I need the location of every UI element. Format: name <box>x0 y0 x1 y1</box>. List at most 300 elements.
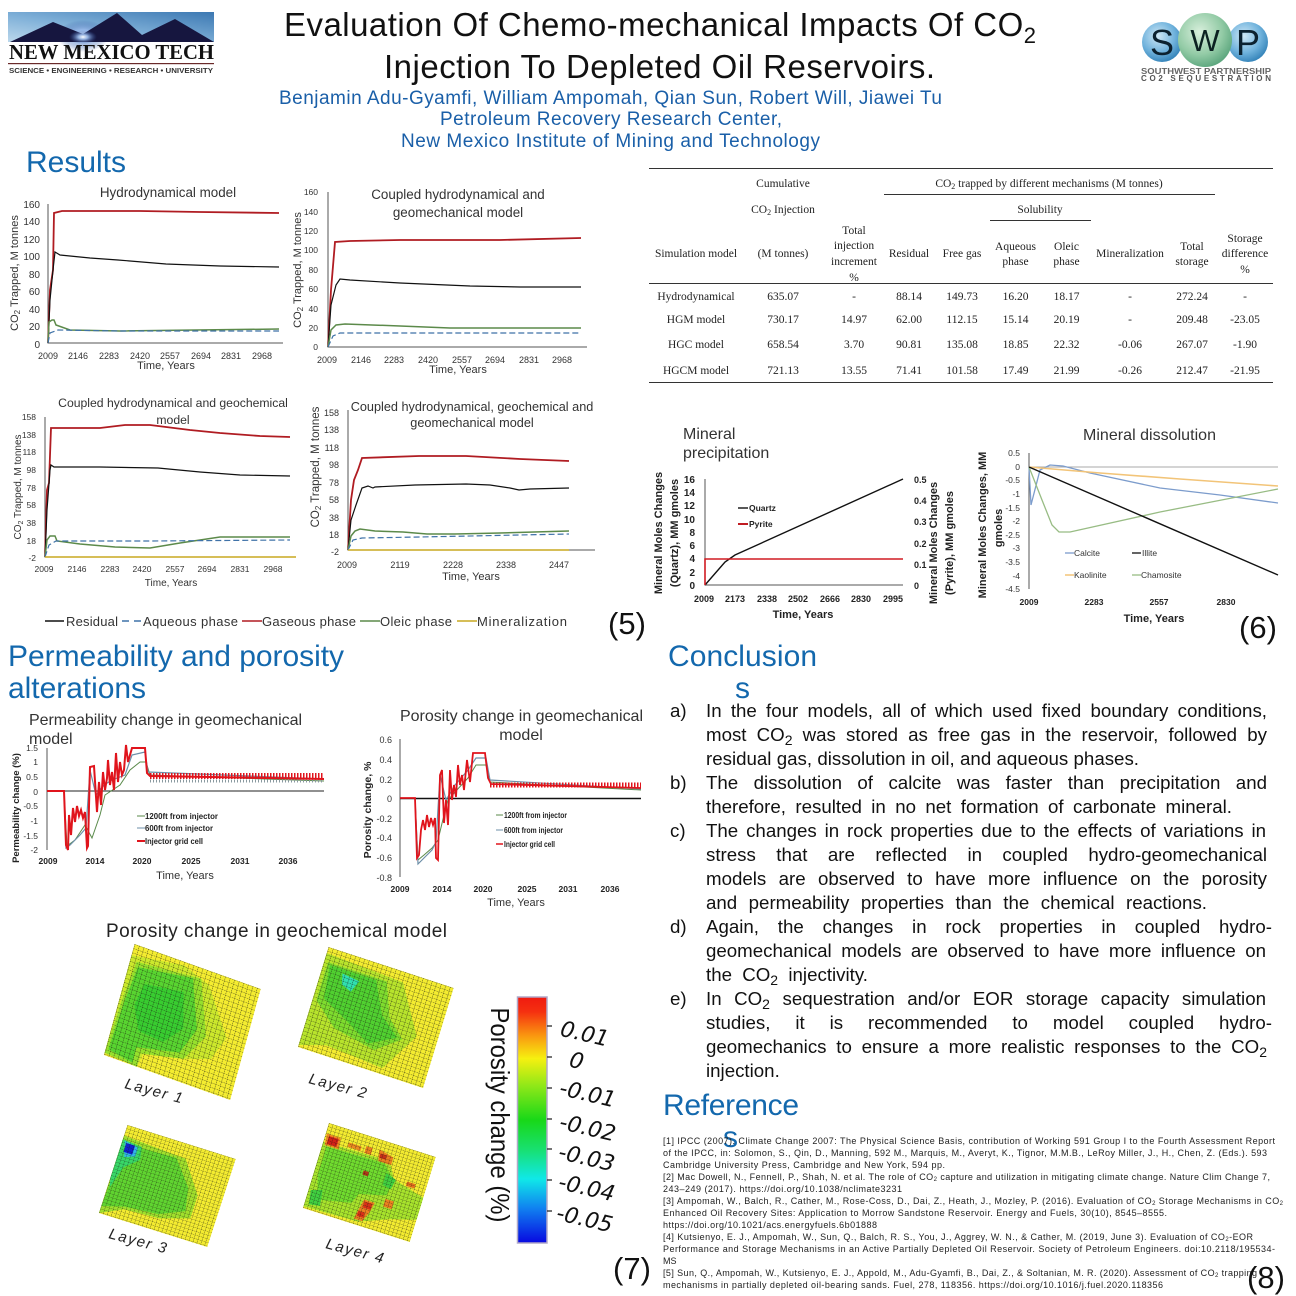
chart: Coupled hydrodynamical and geochemical model: -2 <box>28 553 36 563</box>
chart: Mineral dissolution: -4 <box>1012 571 1020 581</box>
chart: Mineral precipitation: 0.3 <box>914 517 927 527</box>
heading: References: Reference <box>663 1089 799 1122</box>
chart: Mineral dissolution: 2557 <box>1150 597 1169 607</box>
figure number 6: (6) <box>1239 610 1277 645</box>
text block: conclusions: Again, the changes in rock properties in coupled hydro- <box>706 916 1272 937</box>
table: CO2 trapped by mechanism: Aqueous <box>995 241 1036 253</box>
table: CO2 trapped by mechanism: 2 <box>767 208 771 217</box>
chart: Coupled hydrodynamical and geomechanical model: 80 <box>309 265 318 275</box>
chart: Mineral precipitation: 12 <box>684 501 695 512</box>
chart: Mineral precipitation: 2502 <box>788 594 808 604</box>
table: CO2 trapped by mechanism: 88.14 <box>896 291 922 303</box>
label: Porosity change in geomechanical model: model <box>499 727 543 744</box>
chart: Coupled hydrodynamical, geochemical and geomechanical model: Time, Years <box>442 571 500 583</box>
table: CO2 trapped by mechanism: HGCM model <box>663 365 729 377</box>
chart: Coupled hydrodynamical and geochemical model: 2 <box>18 521 25 525</box>
chart: Mineral dissolution: Kaolinite <box>1074 570 1107 580</box>
chart: Porosity change: 2020 <box>474 884 493 894</box>
chart: Coupled hydrodynamical and geochemical model: 2831 <box>231 564 250 574</box>
table: CO2 trapped by mechanism: -1.90 <box>1233 339 1257 351</box>
chart: Coupled hydrodynamical, geochemical and geomechanical model: Coupled hydrodynamical, geochemical and <box>351 400 593 414</box>
chart: Coupled hydrodynamical and geomechanical model <box>292 187 587 376</box>
chart: Coupled hydrodynamical, geochemical and geomechanical model: 158 <box>324 408 339 418</box>
text block: conclusions: and permeability properties than the chemical reactions. <box>706 892 1207 913</box>
label: Porosity change in geomechanical model <box>400 708 643 744</box>
heatmap: Layer 1 <box>104 944 261 1100</box>
chart: Mineral precipitation: 0 <box>914 581 919 591</box>
text block: references: [5] Sun, Q., Ampomah, W., Kutsienyo, E. J., Appold, M., Adu-Gyamfi, B., Dai, Z., & Soltanian, M. R. (2020). Assessment of CO <box>663 1268 1215 1278</box>
logo: New Mexico Tech <box>8 12 214 75</box>
text block: references: 2 <box>1152 1201 1156 1207</box>
table: CO2 trapped by mechanism: CO <box>935 178 951 190</box>
chart: Coupled hydrodynamical and geochemical model: 118 <box>22 447 36 457</box>
chart: Porosity change: 0.4 <box>379 755 392 765</box>
label: Layer 4: Layer 4 <box>324 1235 387 1268</box>
logo: Southwest Partnership: W <box>1190 23 1220 58</box>
chart: Permeability change: -1.5 <box>23 831 38 841</box>
legend: CO2 trapping series <box>45 614 567 629</box>
chart: Hydrodynamical model: 160 <box>23 200 40 211</box>
text block: references: https://doi.org/10.1021/acs.energyfuels.6b01888 <box>663 1220 877 1230</box>
chart: Coupled hydrodynamical, geochemical and geomechanical model: 58 <box>329 495 339 505</box>
chart: Mineral precipitation: 2830 <box>851 594 871 604</box>
colour bar: Porosity change: -0.01 <box>557 1076 618 1113</box>
table: CO2 trapped by mechanism: 149.73 <box>946 291 978 303</box>
chart: Mineral dissolution: Calcite <box>1074 548 1100 558</box>
text block: references: 2 <box>934 1177 938 1183</box>
text block: references: 2 <box>1225 1237 1229 1243</box>
chart: Mineral dissolution: Chamosite <box>1141 570 1182 580</box>
chart: Coupled hydrodynamical and geomechanical model: geomechanical model <box>393 205 523 220</box>
chart: Hydrodynamical model: Hydrodynamical model <box>100 185 236 200</box>
table: CO2 trapped by mechanism: Free gas <box>943 248 982 260</box>
chart: Permeability change: 2020 <box>133 856 152 866</box>
chart: Coupled hydrodynamical, geochemical and geomechanical model: 2447 <box>549 560 569 570</box>
legend: CO2 trapping series: Mineralization <box>477 614 567 629</box>
table: CO2 trapped by mechanism: 721.13 <box>767 365 799 377</box>
chart: Coupled hydrodynamical, geochemical and geomechanical model: geomechanical model <box>410 416 534 430</box>
chart: Permeability change: 1 <box>33 757 38 767</box>
chart: Coupled hydrodynamical and geomechanical model: CO <box>292 311 304 328</box>
text block: references: of the IPCC, in: Solomon, S., Qin, D., Manning, 592 M., Marquis, M., Averyt, K., Tignor, M.M.B., LeRoy Miller, J., H., Chen, Z. (Eds.). 593 <box>663 1148 1267 1158</box>
table: CO2 trapped by mechanism: (M tonnes) <box>758 248 809 260</box>
table: CO2 trapped by mechanism: - <box>1128 291 1132 303</box>
chart: Coupled hydrodynamical, geochemical and geomechanical model: 2 <box>314 505 323 510</box>
chart: Coupled hydrodynamical and geomechanical model: 2283 <box>384 355 404 365</box>
text block: references: mechanisms in partially depleted oil-bearing sands. Fuel, 278, 118356. https://doi.org/10.1016/j.fuel.2020.118356 <box>663 1280 1163 1290</box>
figure number 8: (8) <box>1247 1260 1285 1295</box>
colour bar: Porosity change: -0.02 <box>557 1110 618 1147</box>
chart: Mineral dissolution: -4.5 <box>1005 584 1020 594</box>
chart: Coupled hydrodynamical and geochemical model: Time, Years <box>145 578 197 589</box>
text block: conclusions: therefore, resulted in no net formation of carbonate mineral. <box>706 796 1232 817</box>
heading: Permeability and porosity alterations <box>8 640 344 705</box>
chart: Hydrodynamical model: 0 <box>34 340 40 351</box>
chart: Coupled hydrodynamical and geomechanical model: 2968 <box>552 355 572 365</box>
chart: Mineral precipitation: 2995 <box>883 594 903 604</box>
heading: References: s <box>723 1121 738 1154</box>
chart: Porosity change: Porosity change, % <box>362 761 374 858</box>
chart: Hydrodynamical model: Time, Years <box>137 360 195 372</box>
chart: Mineral precipitation: 2173 <box>725 594 745 604</box>
table: CO2 trapped by mechanism: 112.15 <box>946 314 978 326</box>
chart: Permeability change: 2036 <box>279 856 298 866</box>
text block: conclusions: geomechanical models are observed to have more influence on <box>706 940 1266 961</box>
text block: references: MS <box>663 1256 676 1266</box>
text block: conclusions: The dissolution of calcite was faster than precipitation and <box>706 772 1267 793</box>
table: CO2 trapped by mechanism: 272.24 <box>1176 291 1208 303</box>
chart: Hydrodynamical model: 2557 <box>160 351 180 361</box>
table: CO2 trapped by mechanism: HGC model <box>668 339 724 351</box>
authors and affiliation: Benjamin Adu-Gyamfi, William Ampomah, Qian Sun, Robert Will, Jiawei Tu <box>279 88 942 109</box>
chart: Hydrodynamical model: 100 <box>23 252 40 263</box>
title: Injection To Depleted Oil Reservoirs. <box>384 48 935 85</box>
colour bar: Porosity change: Porosity change (%) <box>485 1008 515 1222</box>
text block: conclusions: stress that are reflected in coupled hydro-geomechanical <box>706 844 1267 865</box>
chart: Mineral dissolution: -1.5 <box>1005 503 1020 513</box>
chart: Coupled hydrodynamical and geochemical model: 38 <box>27 518 36 528</box>
chart: Mineral dissolution: 0.5 <box>1008 448 1020 458</box>
chart: Permeability change: 600ft from injector <box>145 823 214 833</box>
chart: Mineral precipitation: (Pyrite), MM gmoles <box>944 491 956 595</box>
table: CO2 trapped by mechanism: % <box>849 272 859 284</box>
title: Evaluation Of Chemo-mechanical Impacts Of CO <box>284 6 1023 43</box>
table: CO2 trapped by mechanism: 17.49 <box>1003 365 1029 377</box>
table: CO2 trapped by mechanism: 730.17 <box>767 314 799 326</box>
chart: Permeability change: -2 <box>30 845 38 855</box>
chart: Porosity change: 0.6 <box>379 735 392 745</box>
table: CO2 trapped by mechanism: phase <box>1002 256 1029 268</box>
logo: New Mexico Tech: SCIENCE • ENGINEERING • RESEARCH • UNIVERSITY <box>9 68 213 75</box>
label: Mineral precipitation <box>683 426 769 462</box>
chart: Hydrodynamical model: 2694 <box>191 351 211 361</box>
chart: Coupled hydrodynamical, geochemical and geomechanical model: -2 <box>331 547 339 557</box>
chart: Mineral precipitation: 0 <box>689 581 695 592</box>
chart: Coupled hydrodynamical and geomechanical model: Time, Years <box>429 364 487 376</box>
chart: Porosity change: 0 <box>387 794 392 804</box>
text block: conclusions: In the four models, all of which used fixed boundary conditions, <box>706 700 1267 721</box>
chart: Hydrodynamical model: 2968 <box>252 351 272 361</box>
label: Layer 1: Layer 1 <box>123 1075 186 1108</box>
table: CO2 trapped by mechanism: 101.58 <box>946 365 978 377</box>
chart: Coupled hydrodynamical and geochemical model: 2420 <box>133 564 152 574</box>
text block: references: [1] IPCC (2007). Climate Change 2007: The Physical Science Basis, contribution of Working 591 Group I to the Fourth Assessment Report <box>663 1136 1275 1146</box>
legend: CO2 trapping series: Residual <box>66 614 118 629</box>
chart: Mineral dissolution: -3.5 <box>1005 557 1020 567</box>
chart: Mineral precipitation: 6 <box>689 541 695 552</box>
chart: Coupled hydrodynamical and geochemical model: 2283 <box>101 564 120 574</box>
heading: Permeability and porosity alterations: alterations <box>8 672 146 705</box>
table: CO2 trapped by mechanism: Simulation model <box>655 248 737 260</box>
table: CO2 trapped by mechanism: 212.47 <box>1176 365 1208 377</box>
figure number 7: (7) <box>613 1251 651 1286</box>
legend: CO2 trapping series: Oleic phase <box>380 614 452 629</box>
chart: Mineral precipitation: 2 <box>689 568 695 579</box>
chart: Coupled hydrodynamical and geomechanical model: 20 <box>309 323 318 333</box>
chart: Coupled hydrodynamical and geochemical model: 138 <box>22 430 36 440</box>
chart: Coupled hydrodynamical, geochemical and geomechanical model: 98 <box>329 460 339 470</box>
table: CO2 trapped by mechanism: -23.05 <box>1230 314 1260 326</box>
chart: Permeability change <box>11 743 324 882</box>
chart: Mineral dissolution: -2 <box>1012 516 1020 526</box>
chart: Porosity change: 2031 <box>559 884 578 894</box>
chart: Porosity change: -0.2 <box>376 814 392 824</box>
table: CO2 trapped by mechanism: 2 <box>951 182 955 191</box>
table: CO2 trapped by mechanism: 18.17 <box>1054 291 1080 303</box>
chart: Coupled hydrodynamical, geochemical and geomechanical model: 2119 <box>390 560 410 570</box>
text block: references: 2 <box>1215 1273 1219 1279</box>
table: CO2 trapped by mechanism <box>649 168 1273 382</box>
chart: Coupled hydrodynamical and geochemical model: 58 <box>27 500 36 510</box>
chart: Permeability change: 2025 <box>182 856 201 866</box>
table: CO2 trapped by mechanism: 18.85 <box>1003 339 1029 351</box>
chart: Mineral precipitation: 14 <box>684 488 695 499</box>
chart: Mineral precipitation: Mineral Moles Changes <box>928 482 940 604</box>
heading: Conclusions <box>668 640 817 705</box>
logo: Southwest Partnership: P <box>1236 22 1260 63</box>
chart: Coupled hydrodynamical and geomechanical model: 160 <box>304 187 318 197</box>
chart: Mineral dissolution: 0 <box>1015 462 1020 472</box>
table: CO2 trapped by mechanism: 14.97 <box>841 314 867 326</box>
text block: conclusions: In CO2 sequestration and/or EOR storage capacity simulation <box>706 988 1266 1012</box>
chart: Porosity change: 1200ft from injector <box>504 810 568 820</box>
table: CO2 trapped by mechanism: 90.81 <box>896 339 922 351</box>
label: Mineral precipitation: Mineral <box>683 426 735 443</box>
chart: Coupled hydrodynamical and geomechanical model: 2009 <box>317 355 337 365</box>
chart: Coupled hydrodynamical and geochemical model: 2968 <box>264 564 283 574</box>
chart: Coupled hydrodynamical, geochemical and geomechanical model: 138 <box>324 425 339 435</box>
chart: Coupled hydrodynamical and geochemical model: 2146 <box>68 564 87 574</box>
table: CO2 trapped by mechanism: phase <box>1053 256 1080 268</box>
colour bar: Porosity change: -0.04 <box>556 1170 617 1207</box>
table: CO2 trapped by mechanism: Storage <box>1227 233 1263 245</box>
chart: Mineral precipitation: 0.4 <box>914 496 927 506</box>
chart: Permeability change: 0 <box>33 787 38 797</box>
text block: references <box>663 1136 1284 1290</box>
chart: Coupled hydrodynamical and geomechanical model: 2420 <box>418 355 438 365</box>
chart: Permeability change: 0.5 <box>26 772 38 782</box>
chart: Coupled hydrodynamical and geomechanical model: 140 <box>304 207 318 217</box>
text block: conclusions: b) <box>670 772 687 793</box>
colour bar: Porosity change: -0.05 <box>554 1201 615 1238</box>
table: CO2 trapped by mechanism: increment <box>831 256 878 268</box>
text block: references: Performance and Storage Mechanisms in an Active Partially Depleted Oil Reservoir. Society of Petroleum Engineers. doi:10.2118/195534- <box>663 1244 1275 1254</box>
chart: Mineral precipitation: 8 <box>689 528 695 539</box>
table: CO2 trapped by mechanism: difference <box>1222 248 1268 260</box>
chart: Porosity change: 2036 <box>601 884 620 894</box>
table: CO2 trapped by mechanism: - <box>852 291 856 303</box>
chart: Mineral precipitation: 0.2 <box>914 539 927 549</box>
chart: Mineral precipitation <box>653 472 956 621</box>
text block: conclusions <box>670 700 1272 1081</box>
chart: Mineral precipitation: Mineral Moles Changes <box>653 472 665 594</box>
text block: references: Storage Mechanisms in CO <box>1156 1196 1279 1206</box>
chart: Mineral dissolution: -3 <box>1012 543 1020 553</box>
chart: Hydrodynamical model: 140 <box>23 217 40 228</box>
label: Layer 2: Layer 2 <box>307 1070 370 1103</box>
legend: CO2 trapping series: Gaseous phase <box>262 614 356 629</box>
chart: Hydrodynamical model: 80 <box>29 270 40 281</box>
legend: CO2 trapping series: Aqueous phase <box>143 614 238 629</box>
chart: Mineral dissolution: gmoles <box>993 509 1005 547</box>
chart: Mineral dissolution: -0.5 <box>1005 475 1020 485</box>
text block: references: trapping <box>1219 1268 1257 1278</box>
chart: Hydrodynamical model: CO <box>9 314 21 331</box>
table: CO2 trapped by mechanism: Mineralization <box>1096 248 1164 260</box>
chart: Coupled hydrodynamical and geochemical model: model <box>156 413 190 427</box>
label: Permeability change in geomechanical model: model <box>29 731 73 748</box>
chart: Porosity change: Injector grid cell <box>504 839 555 849</box>
chart: Permeability change: Time, Years <box>156 870 214 882</box>
chart: Mineral dissolution: 2283 <box>1085 597 1104 607</box>
text block: references: [4] Kutsienyo, E. J., Ampomah, W., Sun, Q., Balch, R. S., You, J., Aggrey, W. N., & Cather, M. (2019, June 3). Evaluation of CO <box>663 1232 1225 1242</box>
chart: Coupled hydrodynamical and geomechanical model: 2 <box>296 306 305 311</box>
logo: New Mexico Tech: NEW MEXICO TECH <box>9 40 214 64</box>
table: CO2 trapped by mechanism: - <box>1128 314 1132 326</box>
text block: conclusions: geomechanics to ensure a more realistic responses to the CO2 <box>706 1036 1267 1060</box>
chart: Coupled hydrodynamical and geomechanical model: 2831 <box>519 355 539 365</box>
chart: Permeability change: 2014 <box>86 856 105 866</box>
chart: Mineral dissolution: 2009 <box>1020 597 1039 607</box>
text block: references: -EOR <box>1229 1232 1254 1242</box>
text block: references: [2] Mac Dowell, N., Fennell, P., Shah, N. et al. The role of CO <box>663 1172 933 1182</box>
table: CO2 trapped by mechanism: - <box>1243 291 1247 303</box>
logo: Southwest Partnership: S <box>1150 22 1174 63</box>
table: CO2 trapped by mechanism: -21.95 <box>1230 365 1260 377</box>
text block: references: Cambridge University Press, Cambridge and New York, 594 pp. <box>663 1160 945 1170</box>
chart: Coupled hydrodynamical and geomechanical model: 0 <box>313 342 318 352</box>
table: CO2 trapped by mechanism: injection <box>834 240 874 252</box>
chart: Mineral dissolution: Mineral Moles Changes, MM <box>977 452 989 598</box>
heading: Results: Results <box>26 146 126 179</box>
chart: Porosity change <box>362 735 641 909</box>
logo: Southwest Partnership <box>1141 13 1272 83</box>
chart: Coupled hydrodynamical and geomechanical model: 40 <box>309 304 318 314</box>
text block: conclusions: residual gas, dissolution in oil, and aqueous phases. <box>706 748 1139 769</box>
text block: conclusions: a) <box>670 700 687 721</box>
chart: Coupled hydrodynamical, geochemical and geomechanical model: 2009 <box>337 560 357 570</box>
chart: Porosity change: 600ft from injector <box>504 825 564 835</box>
logo: Southwest Partnership: SOUTHWEST PARTNERSHIP <box>1141 67 1272 76</box>
colour bar: Porosity change <box>485 997 618 1243</box>
table: CO2 trapped by mechanism: trapped by different mechanisms (M tonnes) <box>955 178 1163 190</box>
chart: Hydrodynamical model: 2283 <box>99 351 119 361</box>
chart: Coupled hydrodynamical and geomechanical model: 2146 <box>351 355 371 365</box>
chart: Mineral dissolution: -1 <box>1012 489 1020 499</box>
chart: Porosity change: -0.4 <box>376 833 392 843</box>
table: CO2 trapped by mechanism: 16.20 <box>1003 291 1029 303</box>
chart: Coupled hydrodynamical and geochemical model: CO <box>13 525 24 540</box>
table: CO2 trapped by mechanism: Injection <box>771 204 815 216</box>
table: CO2 trapped by mechanism: 635.07 <box>767 291 799 303</box>
chart: Mineral precipitation: 4 <box>689 554 695 565</box>
chart: Permeability change: -1 <box>30 816 38 826</box>
table: CO2 trapped by mechanism: CO <box>751 204 767 216</box>
text block: conclusions: models are observed to have more influence on the porosity <box>706 868 1267 889</box>
chart: Porosity change: 0.2 <box>379 775 392 785</box>
heading: References <box>663 1089 799 1154</box>
table: CO2 trapped by mechanism: -0.26 <box>1118 365 1142 377</box>
title: 2 <box>1024 23 1036 48</box>
table: CO2 trapped by mechanism: 135.08 <box>946 339 978 351</box>
chart: Coupled hydrodynamical and geochemical model <box>13 396 296 589</box>
heading: Conclusions: Conclusion <box>668 640 817 673</box>
heatmap: Layer 4 <box>303 1123 436 1242</box>
table: CO2 trapped by mechanism: 13.55 <box>841 365 867 377</box>
text block: references: 243–249 (2017). https://doi.org/10.1038/nclimate3231 <box>663 1184 902 1194</box>
chart: Hydrodynamical model: 2420 <box>130 351 150 361</box>
colour bar: Porosity change: -0.03 <box>556 1140 617 1177</box>
chart: Permeability change: Permeability change (%) <box>11 753 22 863</box>
table: CO2 trapped by mechanism: Oleic <box>1054 241 1079 253</box>
table: CO2 trapped by mechanism: 62.00 <box>896 314 922 326</box>
chart: Coupled hydrodynamical and geomechanical model: 120 <box>304 226 318 236</box>
chart: Mineral precipitation: 0.1 <box>914 560 927 570</box>
chart: Porosity change: 2025 <box>518 884 537 894</box>
text block: conclusions: e) <box>670 988 687 1009</box>
text block: references: [3] Ampomah, W., Balch, R., Cather, M., Rose-Coss, D., Dai, Z., Heath, J., Mozley, P. (2016). Evaluation of CO <box>663 1196 1152 1206</box>
chart: Mineral precipitation: 0.5 <box>914 475 927 485</box>
heatmap: Layer 3 <box>99 1125 236 1247</box>
label: Mineral precipitation: precipitation <box>683 445 769 462</box>
chart: Hydrodynamical model: 2146 <box>68 351 88 361</box>
chart: Coupled hydrodynamical and geochemical model: 158 <box>22 412 36 422</box>
table: CO2 trapped by mechanism: 267.07 <box>1176 339 1208 351</box>
chart: Mineral precipitation: (Quartz), MM gmoles <box>669 479 681 587</box>
chart: Permeability change: 1200ft from injector <box>145 811 219 821</box>
chart: Porosity change: -0.6 <box>376 853 392 863</box>
text block: conclusions: The changes in rock properties due to the effects of variations in <box>706 820 1266 841</box>
chart: Hydrodynamical model: 2 <box>13 309 22 314</box>
chart: Hydrodynamical model: 60 <box>29 287 40 298</box>
chart: Mineral precipitation: 2338 <box>757 594 777 604</box>
text block: conclusions: most CO2 was stored as free gas in the reservoir, followed by <box>706 724 1267 748</box>
chart: Permeability change: 1.5 <box>26 743 38 753</box>
authors and affiliation <box>279 88 942 152</box>
chart: Porosity change: Time, Years <box>487 897 545 909</box>
colour bar: Porosity change: 0 <box>567 1048 586 1075</box>
chart: Mineral dissolution <box>977 448 1278 625</box>
chart: Coupled hydrodynamical, geochemical and geomechanical model: 38 <box>329 513 339 523</box>
label: Mineral dissolution: Mineral dissolution <box>1083 427 1216 444</box>
chart: Coupled hydrodynamical and geochemical model: Trapped, M tonnes <box>13 434 24 521</box>
table: CO2 trapped by mechanism: 209.48 <box>1176 314 1208 326</box>
heading: Permeability and porosity alterations: Permeability and porosity <box>8 640 344 673</box>
text block: conclusions: studies, it is recommended to model coupled hydro- <box>706 1012 1272 1033</box>
chart: Hydrodynamical model: Trapped, M tonnes <box>9 215 21 310</box>
chart: Porosity change: 2014 <box>433 884 452 894</box>
table: CO2 trapped by mechanism: Solubility <box>1017 204 1063 216</box>
chart: Coupled hydrodynamical, geochemical and geomechanical model: 118 <box>325 443 339 453</box>
label: Permeability change in geomechanical model <box>29 712 302 748</box>
table: CO2 trapped by mechanism: HGM model <box>667 314 725 326</box>
text block: references: Enhanced Oil Recovery Sites: Application to Morrow Sandstone Reservoir. Energy and Fuels, 30(10), 8545–8555. <box>663 1208 1167 1218</box>
table: CO2 trapped by mechanism: -0.06 <box>1118 339 1142 351</box>
colour bar: Porosity change: 0.01 <box>558 1017 611 1052</box>
chart: Coupled hydrodynamical and geochemical model: 2557 <box>166 564 185 574</box>
text block: conclusions: d) <box>670 916 687 937</box>
figure number 5: (5) <box>608 606 646 641</box>
heatmap: Layer 2 <box>298 947 454 1088</box>
chart: Mineral dissolution: Illite <box>1142 548 1157 558</box>
chart: Mineral precipitation: Quartz <box>749 503 776 513</box>
chart: Hydrodynamical model <box>9 185 283 372</box>
table: CO2 trapped by mechanism: 71.41 <box>896 365 922 377</box>
chart: Coupled hydrodynamical and geomechanical model: Trapped, M tonnes <box>292 212 304 307</box>
chart: Porosity change: 2009 <box>391 884 410 894</box>
chart: Coupled hydrodynamical and geochemical model: 18 <box>27 536 36 546</box>
text block: conclusions: c) <box>670 820 686 841</box>
